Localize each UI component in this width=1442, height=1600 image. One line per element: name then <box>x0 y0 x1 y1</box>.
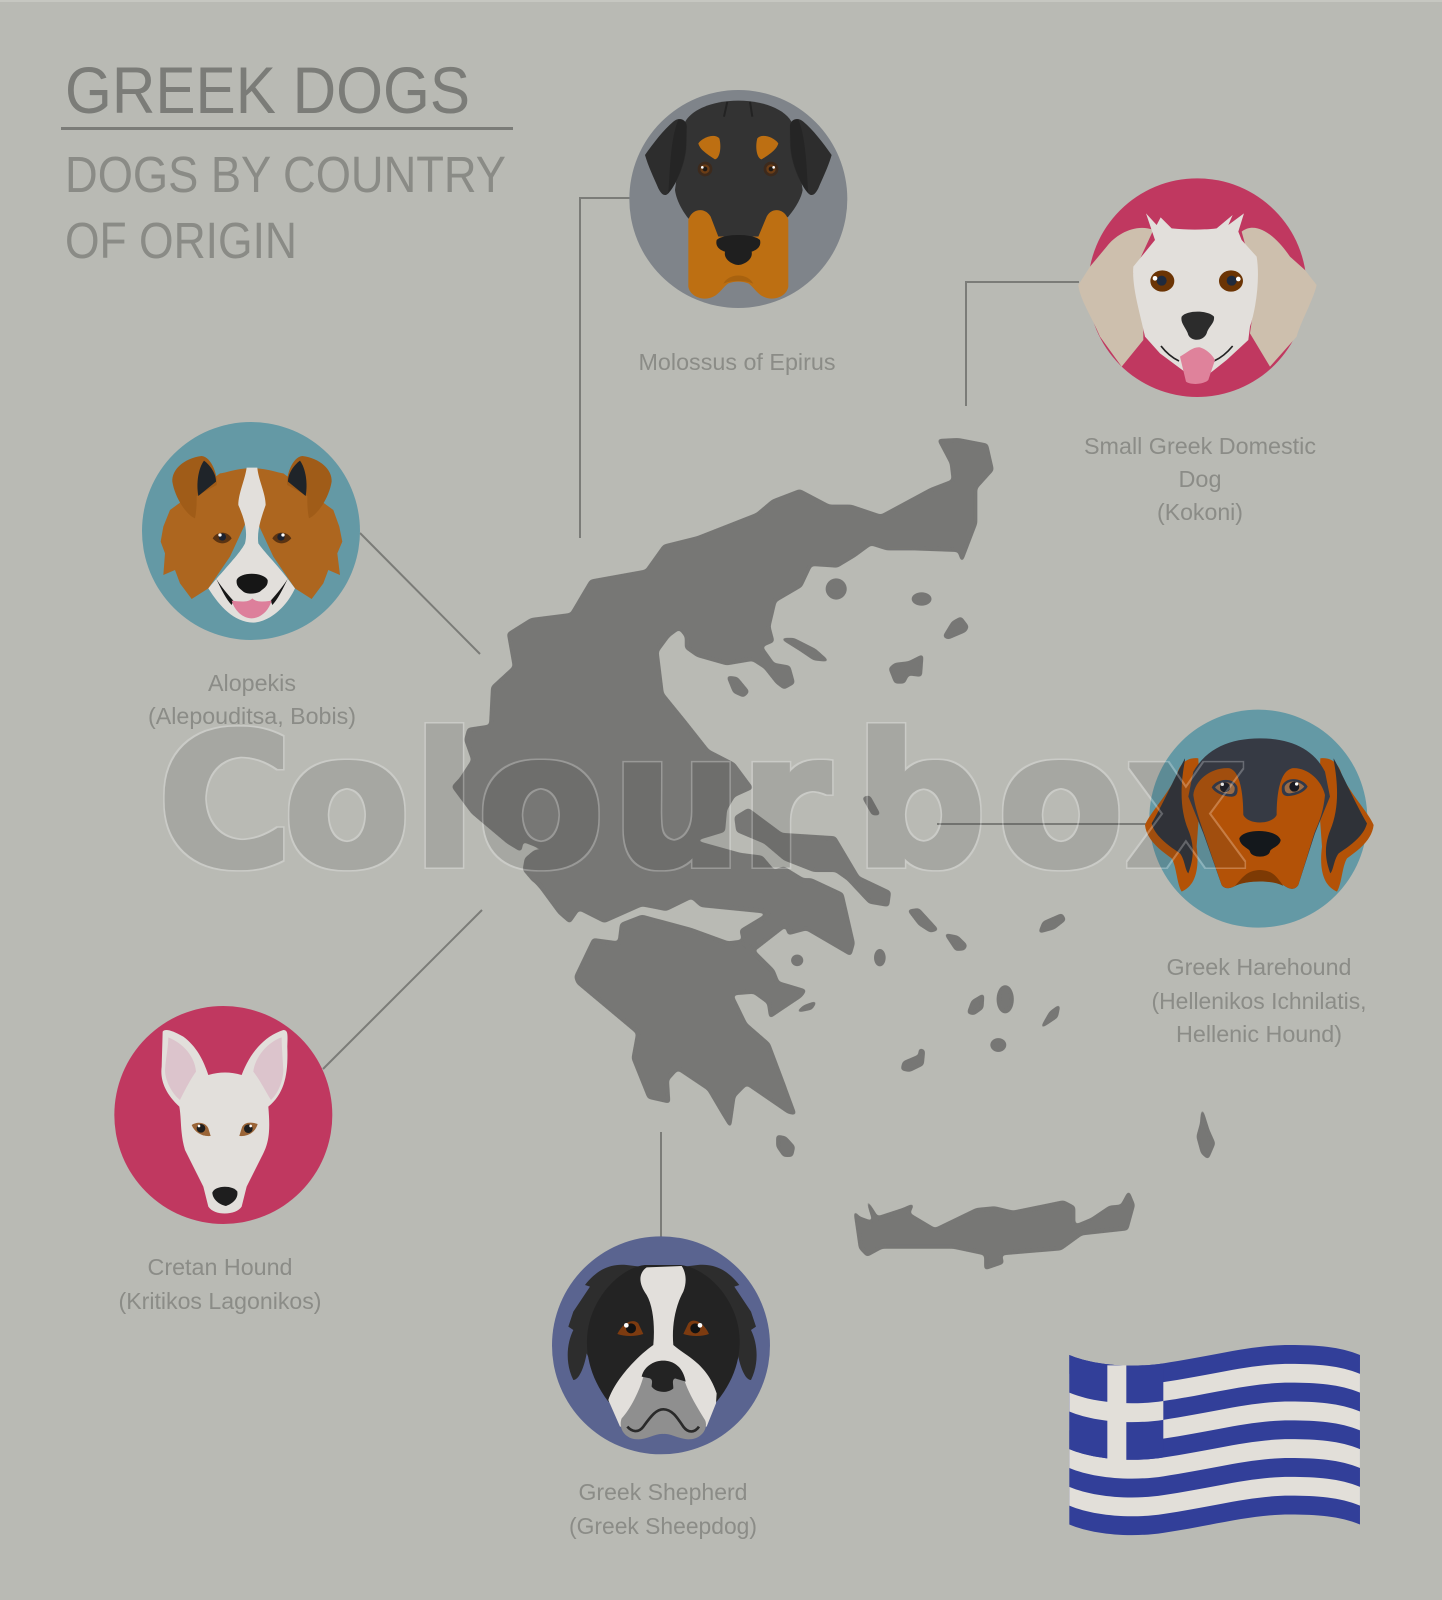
label: Small Greek Domestic Dog: Dog <box>1178 466 1222 492</box>
label: Greek Shepherd: Greek Shepherd <box>578 1479 748 1505</box>
label: Cretan Hound: Cretan Hound <box>148 1254 292 1280</box>
title block <box>61 53 513 269</box>
dog icon: Alopekis <box>142 422 360 640</box>
map of Greece <box>452 438 1215 1270</box>
label: Greek Shepherd <box>569 1479 757 1539</box>
label: Alopekis: (Alepouditsa, Bobis) <box>148 703 356 729</box>
label: Small Greek Domestic Dog <box>1084 433 1316 525</box>
label: Greek Harehound: Hellenic Hound) <box>1176 1021 1342 1047</box>
dog icon: Small Greek Domestic Dog <box>1078 178 1317 397</box>
label: Greek Harehound: (Hellenikos Ichnilatis, <box>1152 988 1366 1014</box>
label: Greek Harehound <box>1152 954 1366 1047</box>
label: Small Greek Domestic Dog: Small Greek Domestic <box>1084 433 1316 459</box>
label: Greek Harehound: Greek Harehound <box>1166 954 1352 980</box>
connector lines <box>323 198 1160 1238</box>
Greek flag <box>1069 1345 1360 1535</box>
subtitle line 1: DOGS BY COUNTRY <box>65 146 506 203</box>
heading: Greek Dogs: GREEK DOGS <box>65 53 470 127</box>
dog icon: Greek Shepherd <box>552 1236 770 1454</box>
label: Alopekis <box>148 670 356 729</box>
label: Molossus of Epirus: Molossus of Epirus <box>638 349 836 375</box>
subtitle line 2: OF ORIGIN <box>65 212 297 269</box>
dog icon: Cretan Hound <box>114 1006 332 1224</box>
label: Alopekis: Alopekis <box>208 670 296 696</box>
label: Cretan Hound: (Kritikos Lagonikos) <box>118 1288 322 1314</box>
dog icon: Greek Harehound <box>1145 710 1374 928</box>
dog icon: Molossus of Epirus <box>629 90 847 308</box>
label: Greek Shepherd: (Greek Sheepdog) <box>569 1513 757 1539</box>
watermark: Colourbox: Colourbox <box>158 696 1245 909</box>
label: Cretan Hound <box>118 1254 322 1314</box>
label: Small Greek Domestic Dog: (Kokoni) <box>1157 499 1243 525</box>
